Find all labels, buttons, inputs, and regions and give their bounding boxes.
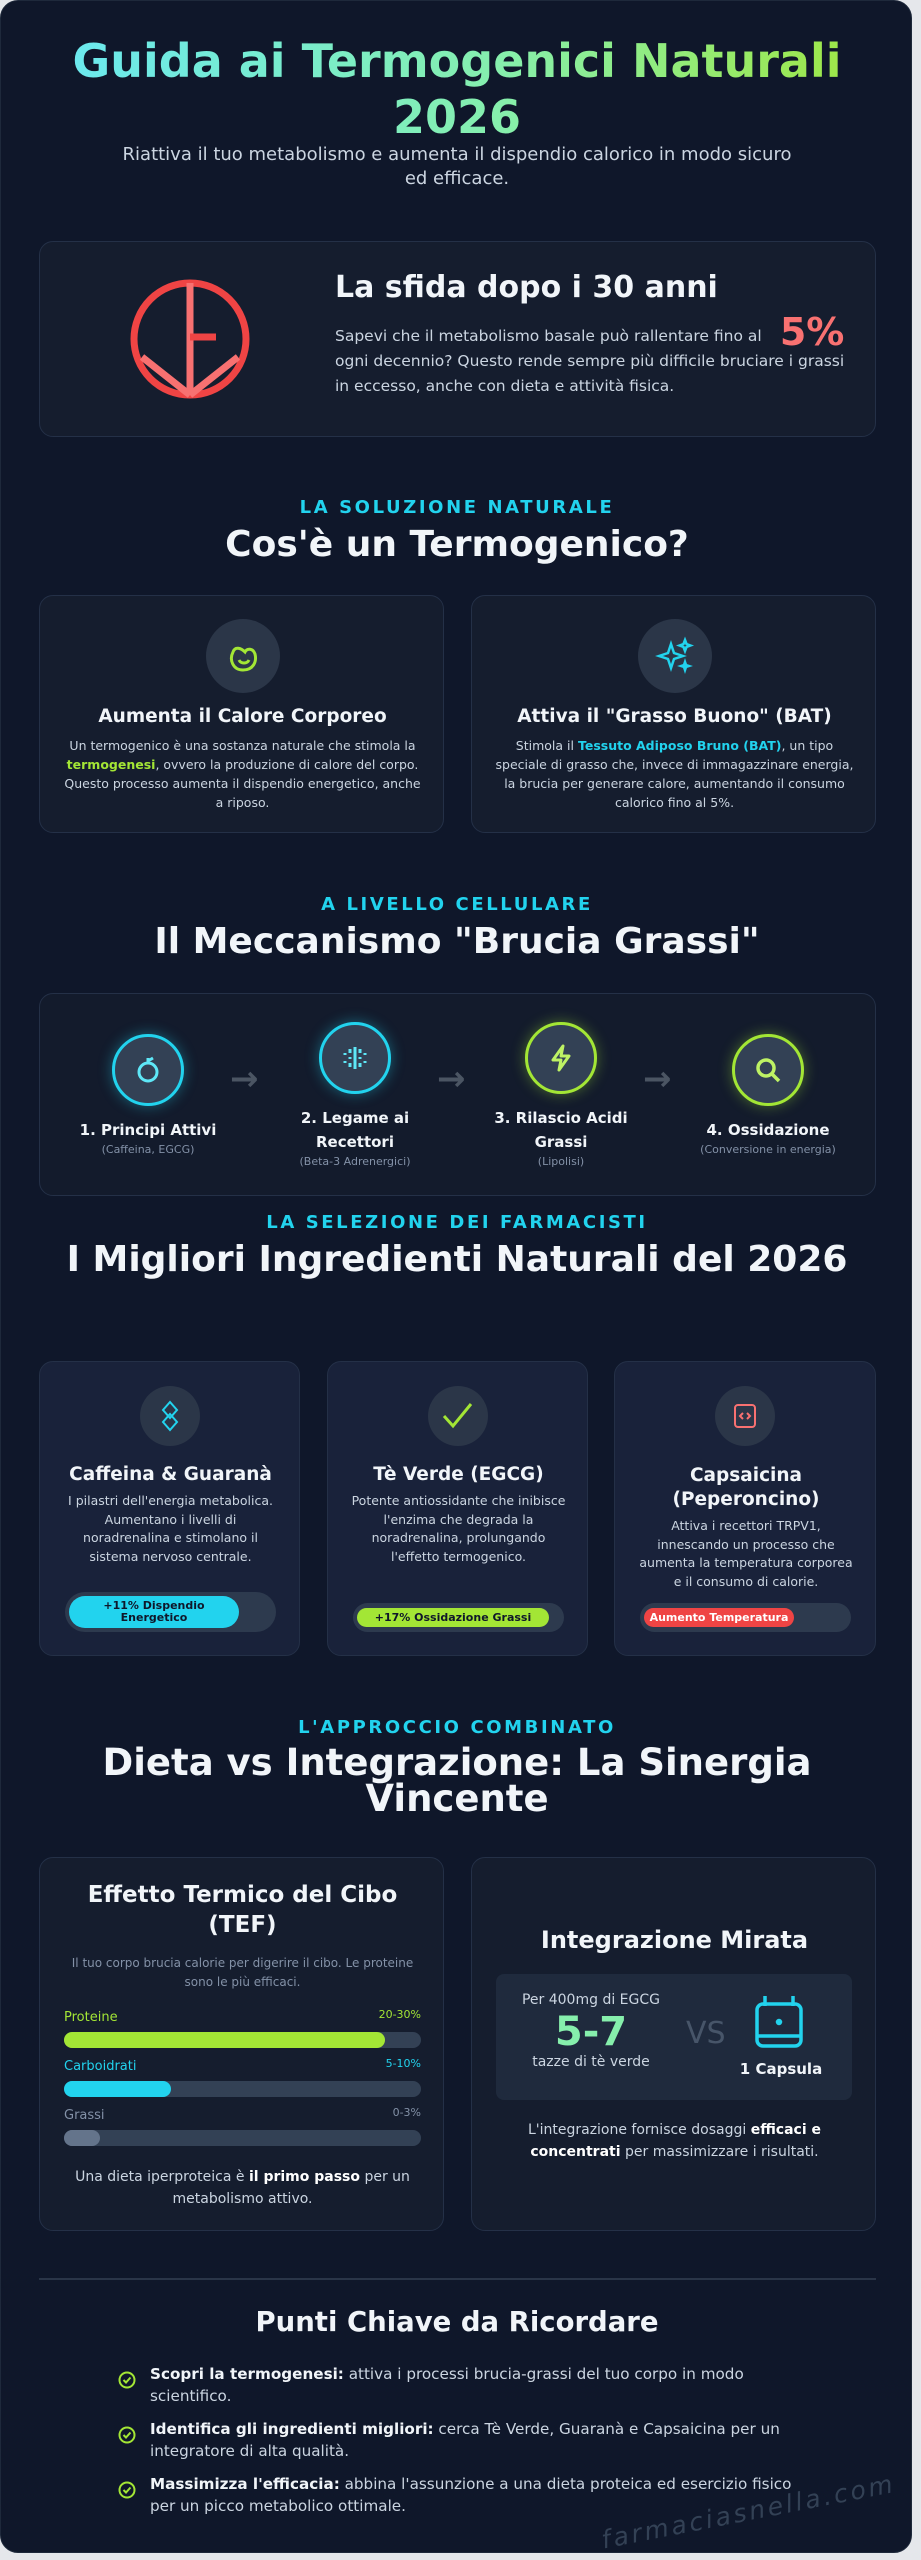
text: Stimola il Tessuto Adiposo Bruno (BAT), un tipo speciale di grasso che, invece di immagazzinare energia, la brucia per generare calore, aumentando il consumo calorico fino al 5%. [496, 738, 853, 810]
panel: process [39, 993, 876, 1196]
title: 2026 [393, 90, 521, 144]
heading [103, 1741, 811, 1820]
comparison box: tazze di tè verde [532, 2054, 650, 2070]
badge: +11% Dispendio [103, 1599, 205, 1612]
badge: Energetico [121, 1611, 187, 1624]
title: Guida ai Termogenici Naturali [72, 34, 842, 88]
title: Attiva il "Grasso Buono" (BAT) [517, 706, 832, 727]
kicker: LA SOLUZIONE NATURALE [300, 497, 614, 518]
kicker: L'APPROCCIO COMBINATO [298, 1717, 616, 1738]
step 1: 1. Principi Attivi [80, 1121, 216, 1139]
title: Integrazione Mirata [541, 1926, 808, 1954]
kicker: A LIVELLO CELLULARE [321, 894, 593, 915]
step 3 [494, 1014, 766, 1168]
title: Aumenta il Calore Corporeo [98, 706, 387, 727]
title: Caffeina & Guaranà [69, 1464, 272, 1485]
badge [353, 1603, 564, 1632]
title [88, 1882, 397, 1938]
comparison box [496, 1974, 852, 2100]
title: (TEF) [208, 1912, 277, 1938]
title: Capsaicina [690, 1465, 802, 1486]
chart: TEF bars: 5-10% [386, 2057, 421, 2070]
main card: Identifica gli ingredienti migliori: cerca Tè Verde, Guaranà e Capsaicina per un integratore di alta qualità. [150, 2420, 780, 2460]
heading: I Migliori Ingredienti Naturali del 2026 [67, 1239, 847, 1280]
badge [65, 1592, 276, 1632]
panel: process: 3. Rilascio Acidi Grassi [494, 1109, 628, 1151]
title: Effetto Termico del Cibo [88, 1882, 397, 1908]
icon [715, 1386, 775, 1446]
key points list [118, 2365, 791, 2515]
badge: +17% Ossidazione Grassi [375, 1611, 531, 1624]
chart: TEF bars: Carboidrati [64, 2059, 136, 2074]
text: I pilastri dell'energia metabolica. Aumentano i livelli di noradrenalina e stimolano il sistema nervoso centrale. [68, 1493, 273, 1564]
chart: TEF bars: 20-30% [379, 2008, 421, 2021]
card: caffeina [39, 1361, 300, 1656]
main card: Scopri la termogenesi: attiva i processi brucia-grassi del tuo corpo in modo scientifico. [150, 2365, 744, 2405]
text: Potente antiossidante che inibisce l'enzima che degrada la noradrenalina, prolungando l'effetto termogenico. [352, 1493, 565, 1564]
panel: integrazione [471, 1857, 876, 2231]
text: Il tuo corpo brucia calorie per digerire il cibo. Le proteine sono le più efficaci. [72, 1956, 413, 1989]
heading: key points: Punti Chiave da Ricordare [256, 2306, 658, 2338]
comparison box: VS [686, 2016, 726, 2051]
title [672, 1465, 820, 1510]
comparison box: 1 Capsula [740, 2060, 822, 2078]
panel: calore [39, 595, 444, 833]
title [1, 33, 913, 145]
comparison box: 5-7 [555, 2009, 627, 2055]
text: Attiva i recettori TRPV1, innescando un processo che aumenta la temperatura corporea e il consumo di calorie. [639, 1518, 853, 1588]
icon [140, 1386, 200, 1446]
badge: Aumento Temperatura [650, 1611, 788, 1624]
title: (Peperoncino) [672, 1489, 820, 1510]
arrow: → [437, 1059, 466, 1099]
text: L'integrazione fornisce dosaggi efficaci e concentrati per massimizzare i risultati. [528, 2122, 821, 2160]
chart: TEF bars: Proteine [64, 2010, 118, 2025]
panel: challenge [39, 241, 876, 437]
icon [638, 619, 712, 693]
badge [640, 1603, 851, 1632]
panel: process: (Beta-3 Adrenergici) [300, 1155, 410, 1168]
icon: slowing metabolism [130, 280, 250, 398]
step 1 [80, 1026, 216, 1156]
heading: Dieta vs Integrazione: La Sinergia [103, 1741, 811, 1784]
panel: process: (Conversione in energia) [700, 1143, 836, 1156]
comparison box: Per 400mg di EGCG [522, 1992, 660, 2008]
chart: TEF bars [64, 2008, 421, 2146]
panel: process: (Lipolisi) [538, 1155, 584, 1168]
panel: BAT [471, 595, 876, 833]
step 4 [700, 1026, 836, 1156]
heading: La sfida dopo i 30 anni [335, 270, 718, 305]
heading: Il Meccanismo "Brucia Grassi" [154, 921, 760, 962]
text: ogni decennio? Questo rende sempre più difficile bruciare i grassi [335, 352, 844, 370]
chart: TEF bars: 0-3% [393, 2106, 421, 2119]
main card: Massimizza l'efficacia: abbina l'assunzione a una dieta proteica ed esercizio fisico per un picco metabolico ottimale. [150, 2475, 791, 2515]
icon: capsule [755, 1996, 803, 2048]
text [335, 310, 844, 395]
heading: Vincente [365, 1777, 549, 1820]
text: in eccesso, anche con dieta e attività fisica. [335, 377, 674, 395]
arrow: → [643, 1059, 672, 1099]
subtitle: Riattiva il tuo metabolismo e aumenta il dispendio calorico in modo sicuro [123, 144, 791, 165]
step 2 [300, 1014, 410, 1168]
card: te verde [327, 1361, 588, 1656]
watermark: farmaciasnella.com [599, 2469, 898, 2554]
panel: process: 4. Ossidazione [706, 1121, 830, 1139]
subtitle: ed efficace. [405, 168, 509, 189]
chart: TEF bars: Grassi [64, 2108, 105, 2123]
heading: Cos'è un Termogenico? [225, 524, 689, 565]
title: Tè Verde (EGCG) [373, 1464, 544, 1485]
arrow: → [230, 1059, 258, 1099]
subtitle [123, 144, 791, 189]
panel: process: 2. Legame ai Recettori [301, 1109, 409, 1151]
text: Un termogenico è una sostanza naturale che stimola la termogenesi, ovvero la produzione di calore del corpo. Questo processo aumenta il dispendio energetico, anche a riposo. [64, 738, 421, 810]
step 1: (Caffeina, EGCG) [102, 1143, 194, 1156]
icon [206, 619, 280, 693]
kicker: LA SELEZIONE DEI FARMACISTI [266, 1212, 648, 1233]
text: Sapevi che il metabolismo basale può rallentare fino al 5% [335, 310, 844, 354]
panel: TEF [39, 1857, 444, 2231]
text: Una dieta iperproteica è il primo passo per un metabolismo attivo. [75, 2169, 410, 2207]
icon [428, 1386, 488, 1446]
card: capsaicina [614, 1361, 876, 1656]
